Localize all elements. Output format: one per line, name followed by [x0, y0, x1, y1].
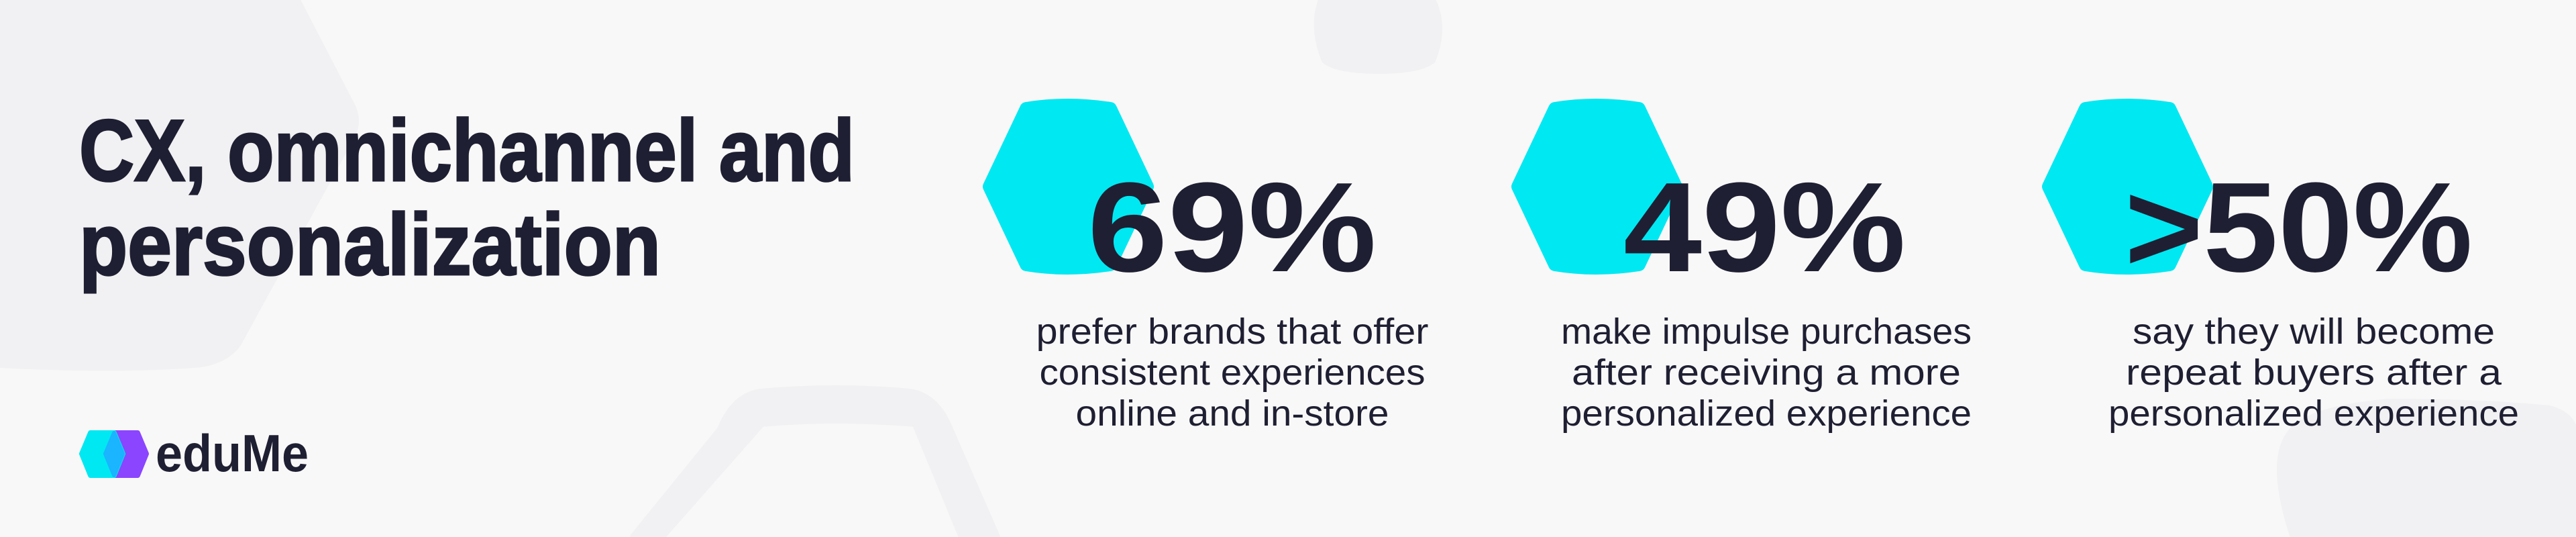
number: 49% [1623, 156, 1906, 299]
icon: cyan hexagon [989, 105, 1147, 268]
description: consistent experiences [1040, 352, 1425, 393]
number: >50% [2125, 156, 2473, 299]
title: personalization [79, 195, 661, 293]
description: personalized experience [1561, 393, 1972, 434]
description [2108, 311, 2519, 434]
number: 69% [1087, 156, 1377, 299]
title: CX, omnichannel and [79, 101, 855, 199]
description: prefer brands that offer [1036, 311, 1429, 352]
icon: logo hexagons [82, 433, 146, 475]
logo: eduMe: eduMe [156, 424, 309, 483]
description: personalized experience [2108, 393, 2519, 434]
title [79, 101, 855, 293]
description: say they will become [2133, 311, 2495, 352]
description: online and in-store [1076, 393, 1389, 434]
stat 2 [1518, 105, 1972, 434]
description: repeat buyers after a [2126, 352, 2502, 393]
description: make impulse purchases [1561, 311, 1972, 352]
logo: eduMe [82, 424, 309, 483]
stat 3 [2049, 105, 2519, 434]
icon: cyan hexagon [2049, 105, 2206, 268]
description [1036, 311, 1429, 434]
icon: cyan hexagon [1518, 105, 1676, 268]
stat 1 [989, 105, 1429, 434]
description: after receiving a more [1572, 352, 1961, 393]
description [1561, 311, 1972, 434]
